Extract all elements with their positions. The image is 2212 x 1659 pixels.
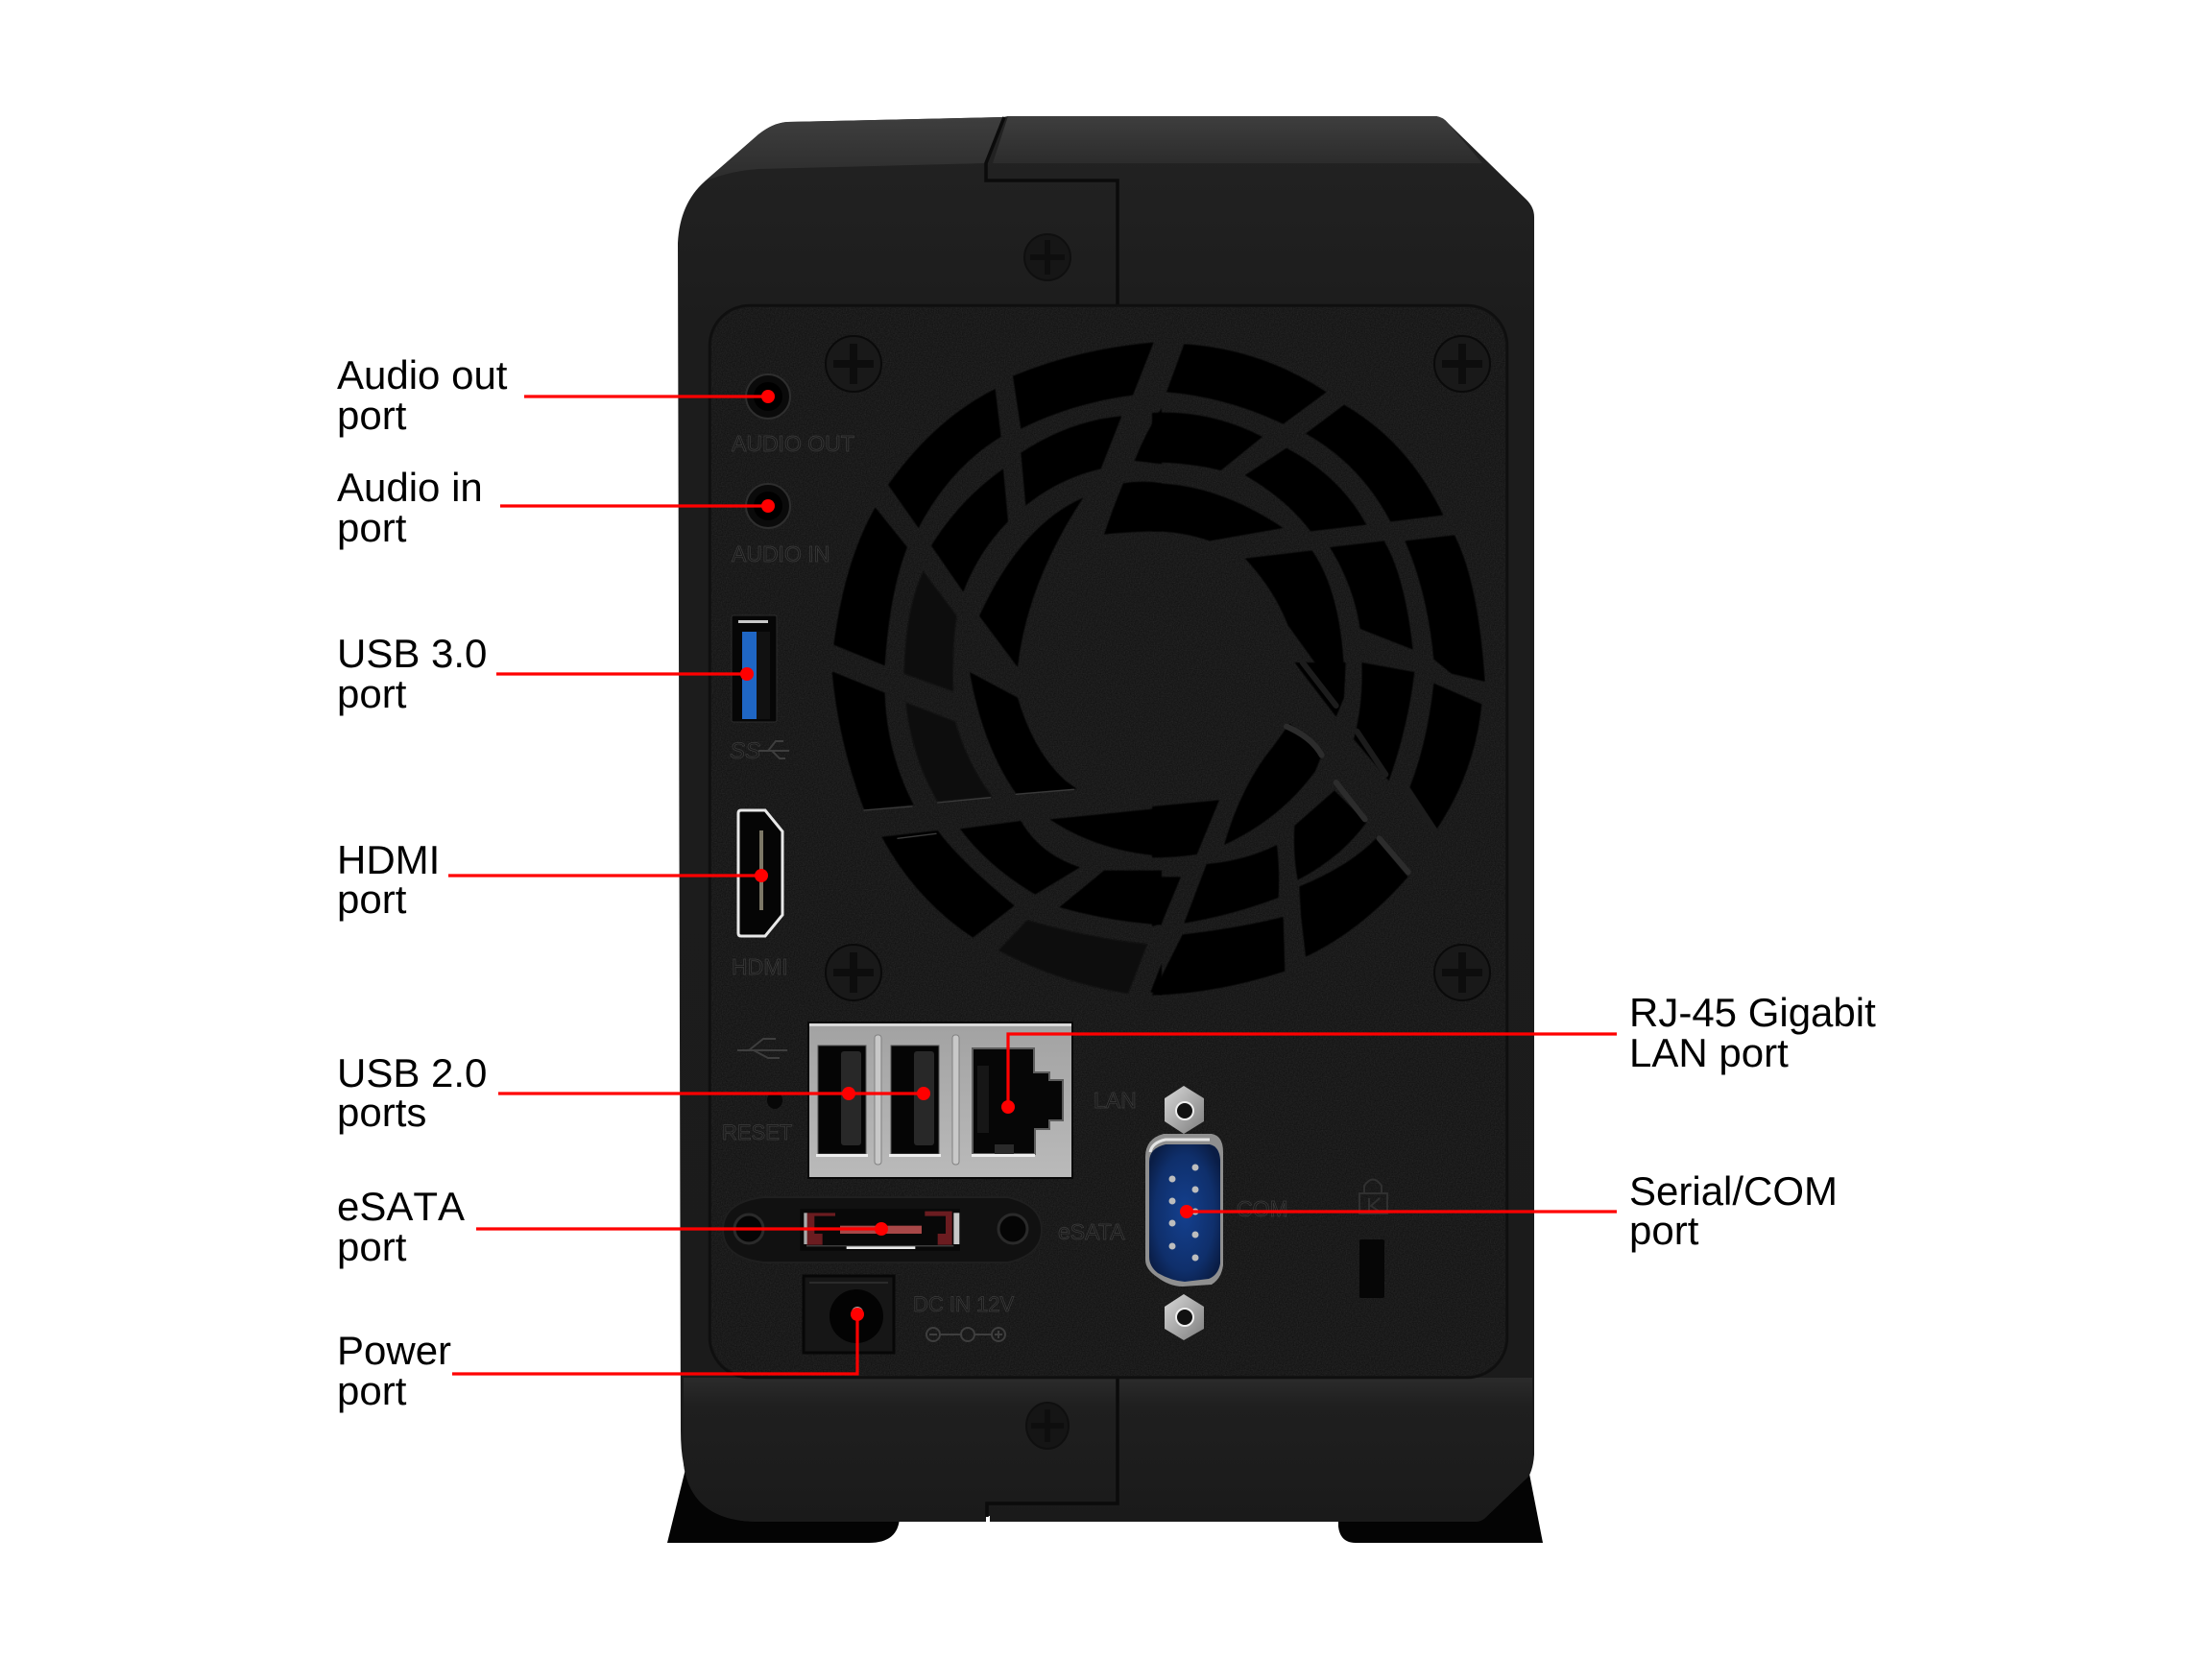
audio out jack [746,374,790,419]
serial connector [1145,1086,1223,1340]
label: audio out: port [337,393,407,438]
audio in embossed label: AUDIO IN [732,541,830,566]
bottom hex nut [1165,1294,1204,1340]
HDMI connector [738,810,782,936]
leader: LAN [1001,1034,1617,1114]
COM embossed label: COM [1237,1196,1288,1221]
fan openings lower right [1152,662,1481,996]
top cover seam [986,117,1118,305]
leader: USB 2.0 [498,1087,930,1100]
lock symbol [1359,1179,1387,1214]
audio in jack [746,484,790,528]
NAS device [667,116,1543,1543]
USB and LAN plate [808,1022,1072,1178]
polarity symbol [926,1328,1005,1341]
USB 3.0 connector [732,615,777,722]
enclosure body [678,116,1534,1522]
fan openings upper right [1152,344,1485,682]
HDMI embossed label: HDMI [732,954,788,979]
label: USB 3.0: port [337,671,407,716]
USB 2.0 port 2 [889,1046,941,1157]
label: audio in: port [337,505,407,550]
eSATA bracket [723,1197,1042,1262]
LAN embossed label: LAN [1094,1088,1137,1113]
label: eSATA: port [337,1224,407,1269]
D-sub blue insert [1149,1144,1220,1282]
label: power: port [337,1368,407,1413]
USB embossed symbol [737,1039,787,1058]
leader: power [452,1308,864,1374]
fan cable and blade highlights [864,662,1433,872]
label: LAN: RJ-45 Gigabit [1629,990,1876,1035]
leader: audio out [524,390,775,403]
label: serial: port [1629,1208,1699,1253]
eSATA port [800,1209,960,1251]
top bevel left [705,117,1003,181]
top bevel right [993,116,1482,163]
rear panel [709,305,1507,1378]
label: audio out: Audio out [337,352,507,397]
panel screw bottom right [1434,945,1490,1000]
bottom body band [684,1378,1532,1522]
label: HDMI: HDMI [337,837,440,882]
leader: HDMI [448,869,768,882]
leader: serial [1180,1205,1617,1218]
eSATA screw holes [734,1214,1027,1243]
bottom screw [1026,1403,1069,1449]
panel screw top right [1434,336,1490,392]
plate top highlight [809,1023,1071,1026]
leader: audio in [500,499,775,513]
left foot [667,1469,900,1543]
lock slot [1359,1239,1384,1298]
fan openings upper left [833,343,1162,691]
leader: USB 3.0 [496,667,754,681]
D-sub shell [1145,1134,1223,1286]
label: serial: Serial/COM [1629,1168,1838,1214]
audio out embossed label: AUDIO OUT [732,431,854,456]
label: HDMI: port [337,877,407,922]
fan openings lower left [832,672,1162,996]
USB 3.0 embossed logo: SS [730,738,760,764]
plate separator 2 [952,1035,959,1165]
right foot [1338,1469,1543,1543]
leader: eSATA [476,1222,888,1236]
label: power: Power [337,1328,451,1373]
USB 2.0 port 1 [816,1046,868,1157]
shell highlight [1150,1140,1210,1152]
reset hole [767,1092,782,1109]
reset embossed label: RESET [722,1120,792,1144]
power jack [804,1276,894,1353]
eSATA embossed label: eSATA [1058,1219,1125,1244]
D-sub pins [1169,1164,1198,1262]
label: audio in: Audio in [337,465,483,510]
bottom cover seam [987,1378,1118,1517]
label: USB 2.0: USB 2.0 [337,1050,487,1095]
label: USB 2.0: ports [337,1090,426,1135]
panel screw top left [826,336,881,392]
plate separator 1 [875,1035,881,1165]
label: eSATA: eSATA [337,1184,465,1229]
label: LAN: LAN port [1629,1030,1789,1075]
top hex nut [1165,1086,1204,1134]
fan grill [832,343,1485,996]
DC in embossed label: DC IN 12V [913,1292,1014,1316]
label: USB 3.0: USB 3.0 [337,631,487,676]
LAN port [972,1048,1063,1157]
top screw [1024,234,1070,280]
panel screw bottom left [826,945,881,1000]
USB 3.0 embossed logo [730,738,789,764]
